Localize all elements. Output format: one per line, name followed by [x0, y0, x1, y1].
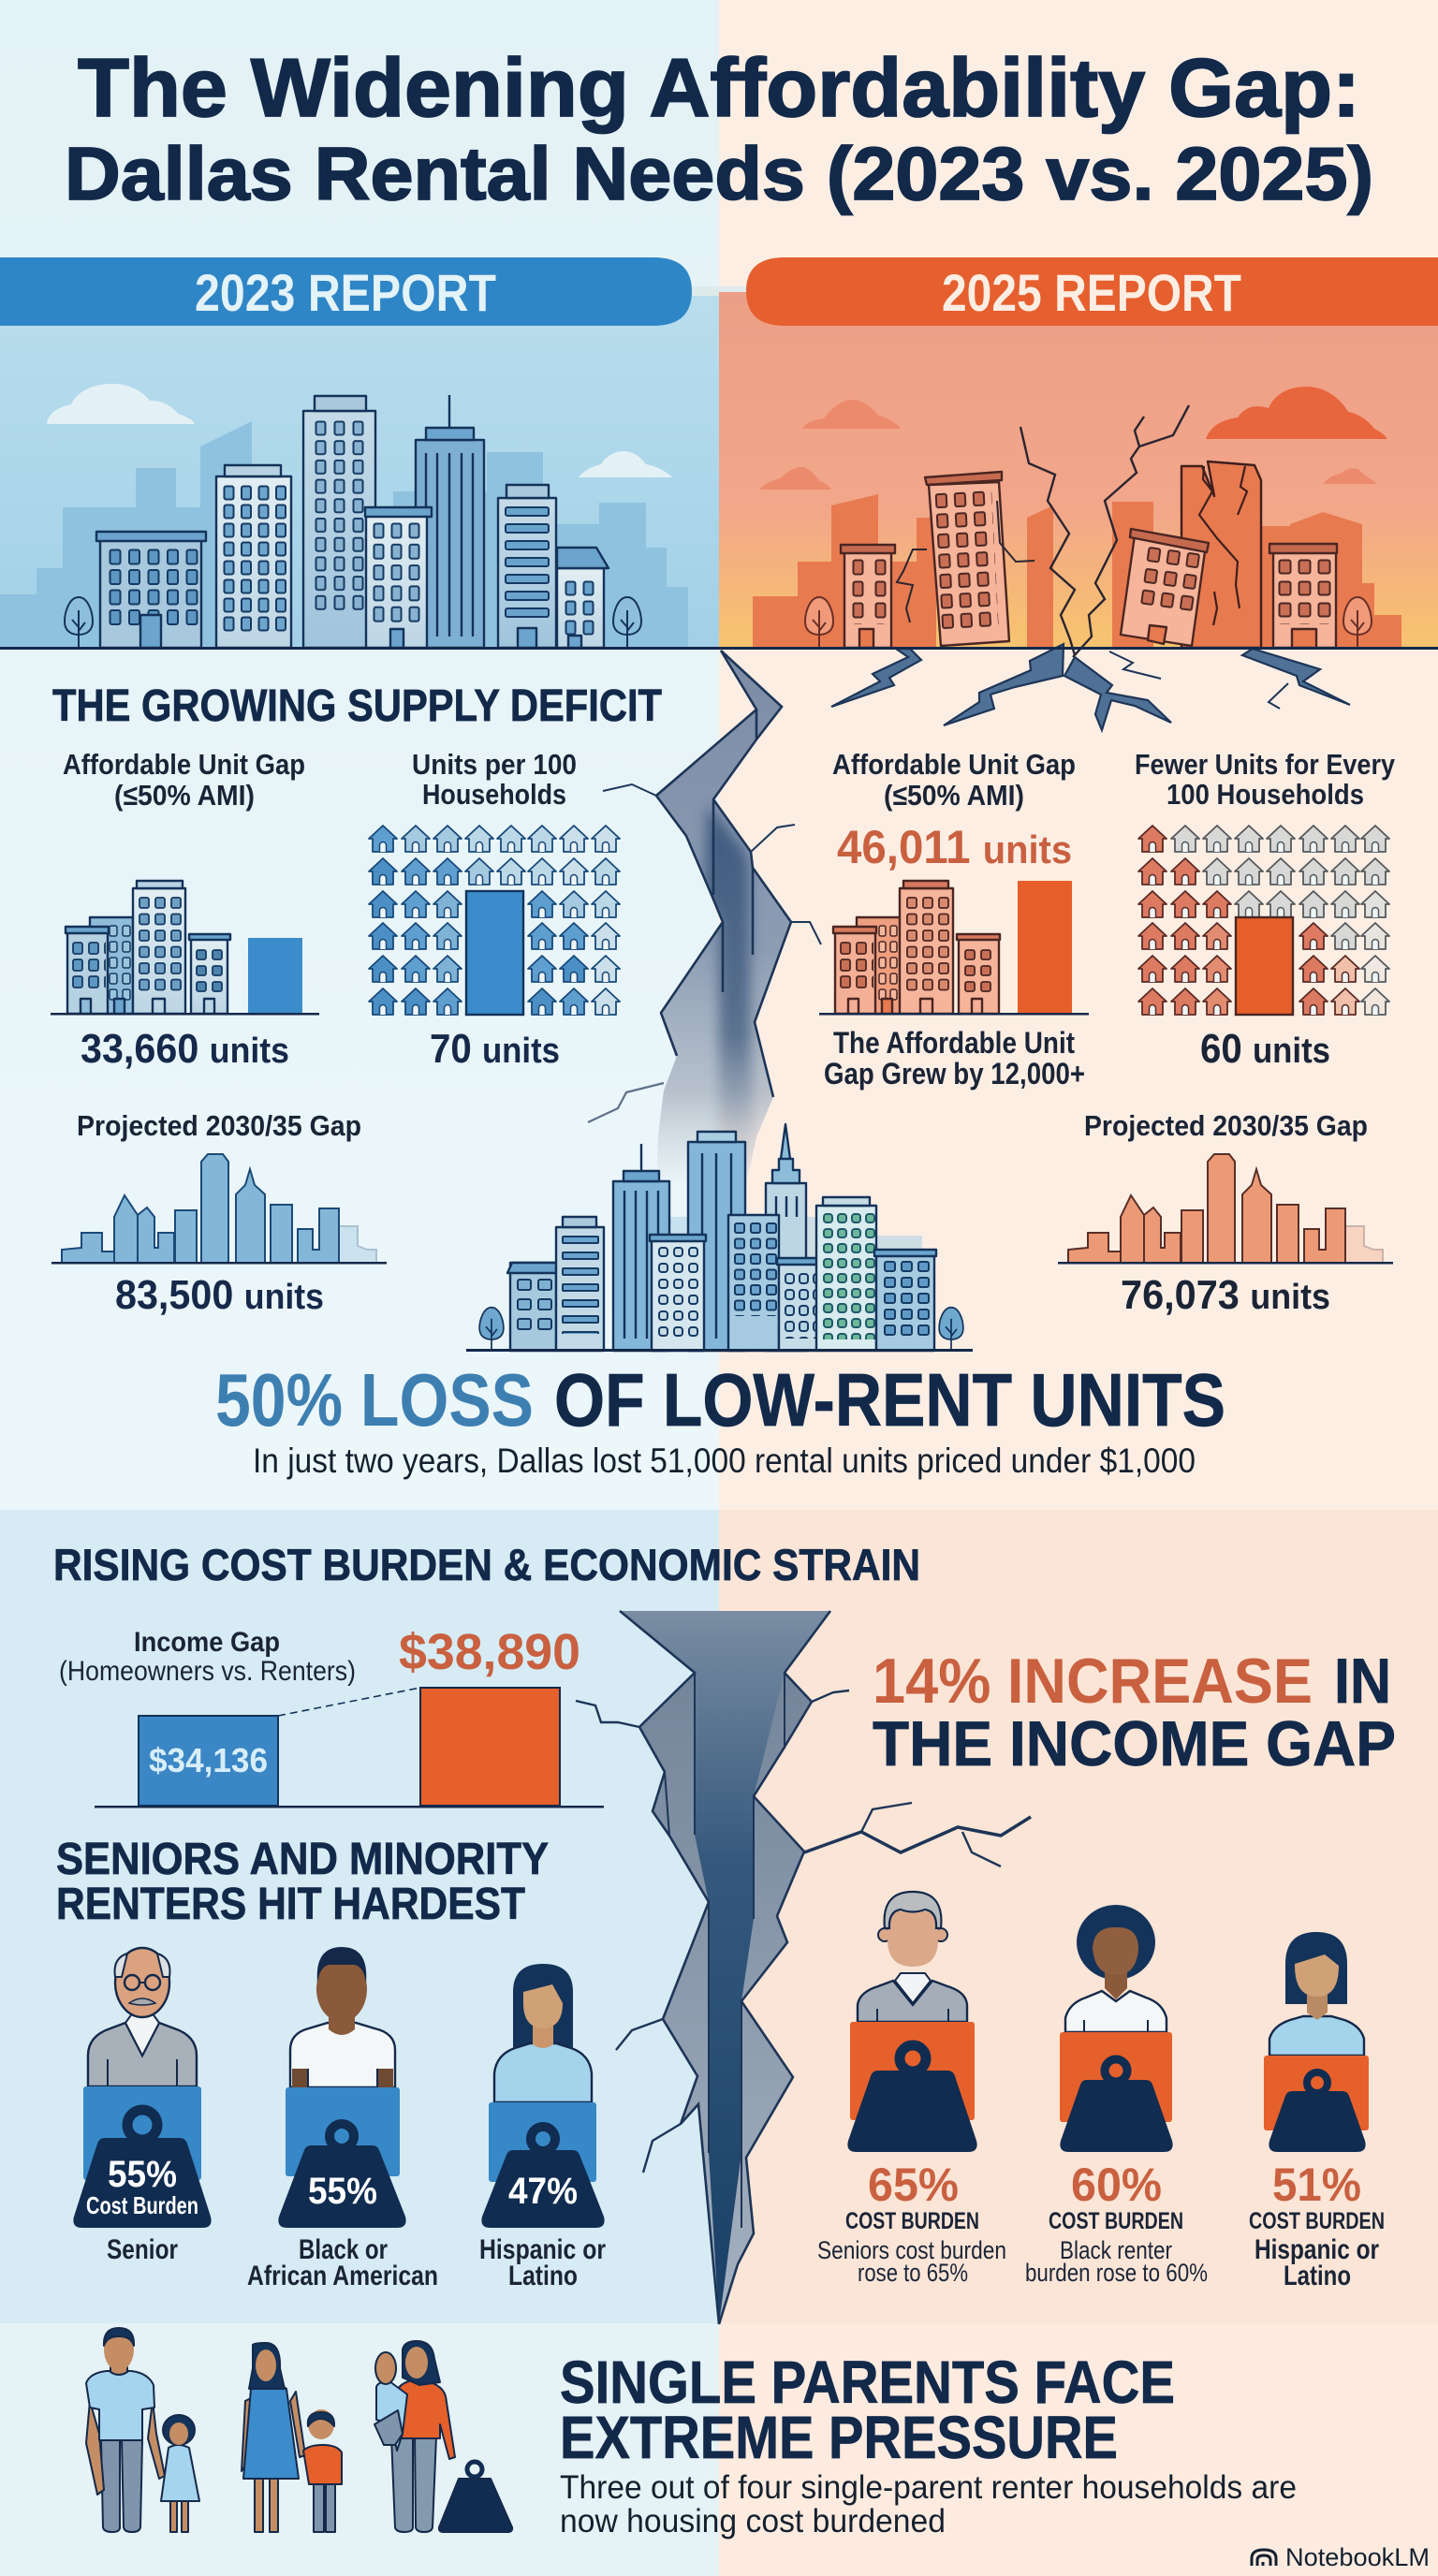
headline: 14% increase in the income gap: [873, 1646, 1396, 1779]
heading bar: 2023 report: 2023 REPORT: [195, 263, 496, 322]
weight: 51%: [1269, 2072, 1366, 2152]
skyline: projected 2023: [51, 1154, 387, 1264]
headline: 14% increase in the income gap: THE INCOME GAP: [873, 1708, 1396, 1779]
icon: father and daughter: [86, 2328, 199, 2532]
weight: 60%: [1060, 2059, 1173, 2152]
heading: seniors and minority renters: [56, 1835, 549, 1929]
caption: black renter 60%: burden rose to 60%: [1025, 2259, 1208, 2287]
icon: clouds: [47, 384, 672, 477]
weight: 55% senior: Cost Burden: [86, 2191, 198, 2219]
panel: 2023 supply metrics: [51, 748, 620, 1318]
label: units per 100 households: Households: [422, 778, 566, 811]
callout: gap grew: Gap Grew by 12,000+: [824, 1057, 1085, 1090]
body: three out of four: Three out of four single-parent renter households are: [560, 2469, 1297, 2506]
icon: mother and son: [242, 2343, 342, 2532]
notebooklm logo: NotebookLM: [1285, 2543, 1430, 2571]
caption: seniors 65%: 65%: [868, 2159, 959, 2211]
headline: 50% loss of low-rent units: 50% LOSS: [215, 1358, 534, 1442]
ground line: [0, 647, 1438, 650]
subheading: 51,000 lost units: In just two years, Dallas lost 51,000 rental units priced under $1,000: [253, 1442, 1196, 1480]
caption: hispanic or latino 51%: 51%: [1272, 2159, 1361, 2211]
value: 70 units: 70 units: [430, 1026, 560, 1072]
icon: trees: [805, 597, 1372, 648]
ground under city: [719, 648, 1438, 741]
label: affordable unit gap 2025: [832, 748, 1076, 812]
label: affordable unit gap 2023: Affordable Unit Gap: [63, 748, 305, 781]
title: The Widening Affordability Gap:: [78, 41, 1360, 134]
label: senior: Senior: [107, 2234, 178, 2265]
background glow: [655, 1217, 922, 1348]
label: affordable unit gap 2025: Affordable Unit Gap: [832, 748, 1076, 781]
headline: 14% increase in the income gap: IN: [1334, 1646, 1391, 1717]
label: units per 100 households: Units per 100: [412, 748, 577, 781]
caption: hispanic or latino 51%: Latino: [1284, 2261, 1351, 2291]
label: fewer units: 100 Households: [1167, 778, 1364, 811]
value: 60 units: 60 units: [1200, 1026, 1330, 1072]
heading: rising cost burden: RISING COST BURDEN & ECONOMIC STRAIN: [53, 1540, 920, 1589]
person 2023: hispanic or latino: [479, 1964, 606, 2291]
headline: 50% loss of low-rent units: OF LOW-RENT UNITS: [554, 1358, 1225, 1442]
panel: 2025 cracked city illustration: [719, 257, 1438, 741]
icon: notebooklm mark: [1252, 2550, 1276, 2566]
weight: 55% senior: [73, 2110, 212, 2228]
value: $38,890: $38,890: [399, 1624, 580, 1680]
weight: 47% hispanic: 47%: [508, 2171, 578, 2212]
label: projected gap 2023: Projected 2030/35 Gap: [77, 1109, 361, 1142]
heading bar: 2025 report: 2025 REPORT: [942, 263, 1241, 322]
caption: black renter 60%: [1025, 2159, 1208, 2287]
body: three out of four: [560, 2469, 1297, 2539]
callout: gap grew: The Affordable Unit: [833, 1026, 1075, 1060]
headline: 50% loss of low-rent units: [215, 1358, 1225, 1442]
bar: 60 units: [1236, 917, 1293, 1015]
chart: income gap: [59, 1624, 604, 1808]
caption: black renter 60%: 60%: [1071, 2159, 1162, 2211]
title: [65, 41, 1373, 215]
icon group: single parent families: [86, 2328, 512, 2532]
label: fewer units: Fewer Units for Every: [1135, 748, 1396, 781]
heading: single parents face extreme pressure: SINGLE PARENTS FACE: [560, 2349, 1175, 2416]
label: income gap: (Homeowners vs. Renters): [59, 1656, 356, 1687]
icon: trees: [65, 597, 641, 648]
caption: seniors 65%: COST BURDEN: [845, 2208, 979, 2234]
background skyline: [0, 421, 688, 648]
caption: seniors 65%: Seniors cost burden: [817, 2236, 1006, 2264]
person 2023: senior: [73, 1948, 212, 2265]
value: 76,073 units: 76,073 units: [1121, 1272, 1330, 1318]
panel: 2025 supply metrics: [819, 748, 1396, 1318]
central city illustration: [466, 1124, 973, 1352]
value: 33,660 units: 33,660 units: [81, 1026, 289, 1072]
callout: gap grew: [824, 1026, 1085, 1090]
person 2025: senior: [817, 1892, 1006, 2287]
buildings: [507, 1124, 936, 1351]
headline: 14% increase in the income gap: 14% INCREASE: [873, 1646, 1313, 1717]
label: black or african american: Black or: [299, 2234, 388, 2265]
weight: 55% senior: 55%: [108, 2154, 177, 2195]
mini city with gap bar 2023: [51, 881, 319, 1015]
building group: [96, 395, 609, 648]
building group: [841, 472, 1337, 648]
bar: 70 units: [466, 891, 523, 1015]
weight: 65%: [847, 2045, 977, 2152]
label: hispanic or latino: [479, 2234, 606, 2291]
label: hispanic or latino: Latino: [508, 2261, 578, 2291]
value: 46,011 units: 46,011 units: [837, 821, 1072, 873]
icon: trees: [479, 1308, 963, 1351]
icon: clouds: [760, 387, 1387, 490]
ground cracks: [831, 644, 1350, 730]
person 2025: hispanic renter: [1249, 1932, 1385, 2291]
caption: hispanic or latino 51%: Hispanic or: [1255, 2234, 1379, 2265]
caption: seniors 65%: [817, 2159, 1006, 2287]
weight: 55% black: [278, 2124, 406, 2228]
heading: single parents face extreme pressure: [560, 2349, 1175, 2471]
weight: 47% hispanic: [481, 2127, 605, 2228]
caption: hispanic or latino 51%: [1249, 2159, 1385, 2291]
label: black or african american: African American: [247, 2261, 438, 2291]
heading: seniors and minority renters: RENTERS HIT HARDEST: [56, 1880, 525, 1929]
crack lines through buildings: [897, 405, 1189, 657]
background skyline: [753, 494, 1401, 648]
label: black or african american: [247, 2234, 438, 2291]
body: three out of four: now housing cost burdened: [560, 2503, 946, 2539]
caption: black renter 60%: COST BURDEN: [1049, 2208, 1183, 2234]
icon: mother with child and weight: [374, 2341, 512, 2532]
label: income gap: Income Gap: [134, 1627, 280, 1658]
mini city with gap bar 2025: [819, 881, 1089, 1015]
person 2023: black or african american: [247, 1947, 438, 2291]
central chasm upper: [588, 651, 821, 1189]
crack branches: [576, 1690, 1031, 2173]
heading: seniors and minority renters: SENIORS AND MINORITY: [56, 1835, 549, 1884]
label: affordable unit gap 2023: (≤50% AMI): [114, 779, 255, 812]
label: projected gap 2025: Projected 2030/35 Gap: [1084, 1109, 1368, 1142]
weight: 55% black: 55%: [308, 2171, 377, 2212]
person 2025: black renter: [1025, 1905, 1208, 2287]
bar: renters: [420, 1688, 560, 1806]
label: fewer units: [1135, 748, 1396, 811]
pictogram: houses per 100 households 2023: [369, 826, 620, 1015]
heading: single parents face extreme pressure: EXTREME PRESSURE: [560, 2404, 1118, 2471]
title: Dallas Rental Needs (2023 vs. 2025): [65, 132, 1373, 215]
caption: hispanic or latino 51%: COST BURDEN: [1249, 2208, 1385, 2234]
heading: the growing supply deficit: THE GROWING SUPPLY DEFICIT: [52, 681, 662, 731]
label: affordable unit gap 2025: (≤50% AMI): [884, 779, 1024, 812]
central chasm lower: [576, 1611, 1031, 2324]
value: $34,136: $34,136: [149, 1741, 268, 1779]
heading bar: 2025 report: [746, 257, 1438, 326]
heading bar: 2023 report: [0, 257, 692, 326]
pictogram: houses per 100 households 2025: [1138, 826, 1389, 1015]
label: units per 100 households: [412, 748, 577, 811]
skyline: projected 2025: [1058, 1154, 1393, 1264]
bar: homeowners: [139, 1716, 278, 1806]
cracked tower: [1181, 461, 1261, 648]
label: affordable unit gap 2023: [63, 748, 305, 812]
caption: black renter 60%: Black renter: [1060, 2236, 1172, 2264]
connector between report bars: [692, 286, 746, 296]
value: 83,500 units: 83,500 units: [115, 1272, 324, 1318]
label: hispanic or latino: Hispanic or: [479, 2234, 606, 2265]
label: income gap: [59, 1627, 356, 1687]
panel: 2023 city illustration: [0, 257, 719, 648]
caption: seniors 65%: rose to 65%: [858, 2259, 968, 2287]
